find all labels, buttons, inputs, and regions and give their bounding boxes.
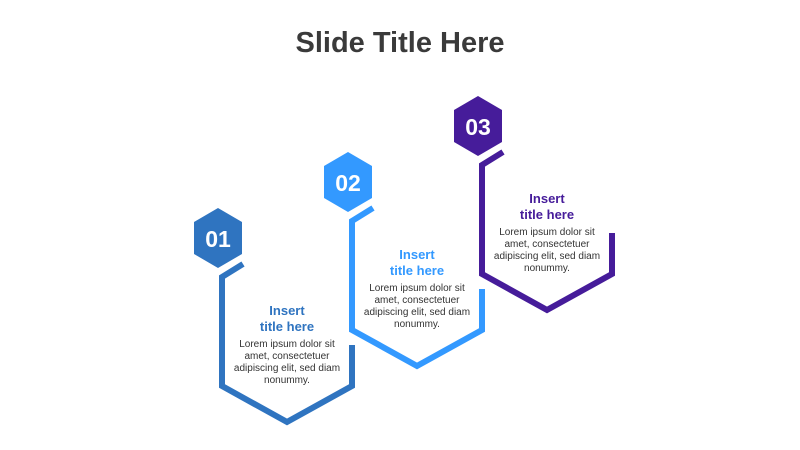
icon: hexagon 02: 02 <box>335 170 361 196</box>
body 03: Lorem ipsum dolor sit <box>499 227 595 238</box>
icon: hexagon 01: 01 <box>205 226 231 252</box>
heading 03: title here <box>520 207 574 222</box>
icon: hexagon 03: 03 <box>465 114 491 140</box>
panel: step 02 <box>324 152 482 366</box>
body 02: amet, consectetuer <box>374 295 460 306</box>
body 03: nonummy. <box>524 263 570 274</box>
heading 02: title here <box>390 263 444 278</box>
icon: hexagon 01 <box>194 208 242 268</box>
body 01: amet, consectetuer <box>244 351 330 362</box>
body 02: Lorem ipsum dolor sit <box>369 283 465 294</box>
panel: step 03 <box>454 96 612 310</box>
icon: hexagon 02 <box>324 152 372 212</box>
panel: step 01 <box>194 208 352 422</box>
body 03: adipiscing elit, sed diam <box>494 251 600 262</box>
body 02: adipiscing elit, sed diam <box>364 307 470 318</box>
title: Slide Title Here <box>296 27 504 59</box>
body 01: nonummy. <box>264 375 310 386</box>
heading 03: Insert <box>529 191 565 206</box>
icon: hexagon 03 <box>454 96 502 156</box>
body 02: nonummy. <box>394 319 440 330</box>
heading 02: Insert <box>399 247 435 262</box>
outline 03 <box>482 152 612 310</box>
outline 01 <box>222 264 352 422</box>
outline 02 <box>352 208 482 366</box>
body 01: adipiscing elit, sed diam <box>234 363 340 374</box>
heading 01: Insert <box>269 303 305 318</box>
heading 01: title here <box>260 319 314 334</box>
body 01: Lorem ipsum dolor sit <box>239 339 335 350</box>
body 03: amet, consectetuer <box>504 239 590 250</box>
